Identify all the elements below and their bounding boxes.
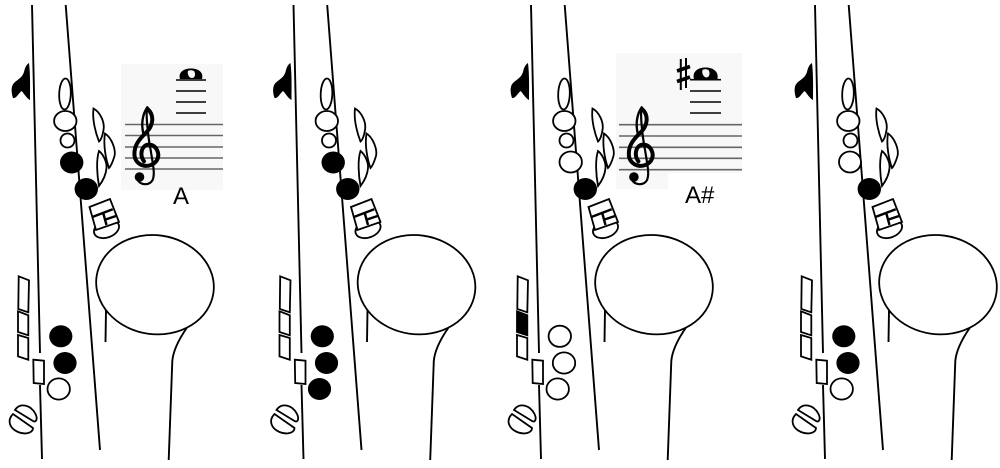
open keys xyxy=(801,152,861,400)
staff notation: A sharp xyxy=(616,53,742,189)
saxophone fingering 4 xyxy=(793,5,1000,460)
saxophone fingering 1 xyxy=(10,5,220,460)
saxophone fingering 2 xyxy=(271,5,482,460)
open side key xyxy=(280,311,290,335)
open keys xyxy=(18,311,70,400)
saxophone fingering 3 xyxy=(509,5,719,460)
closed side key xyxy=(517,311,527,335)
closed keys xyxy=(49,152,98,374)
open keys xyxy=(546,152,582,400)
closed key xyxy=(574,178,597,200)
note name A: A xyxy=(173,183,189,210)
sharp sign xyxy=(677,58,690,90)
closed keys xyxy=(308,152,360,400)
staff notation: A xyxy=(121,64,223,190)
closed keys xyxy=(832,178,881,374)
note name A sharp: A# xyxy=(685,182,715,209)
